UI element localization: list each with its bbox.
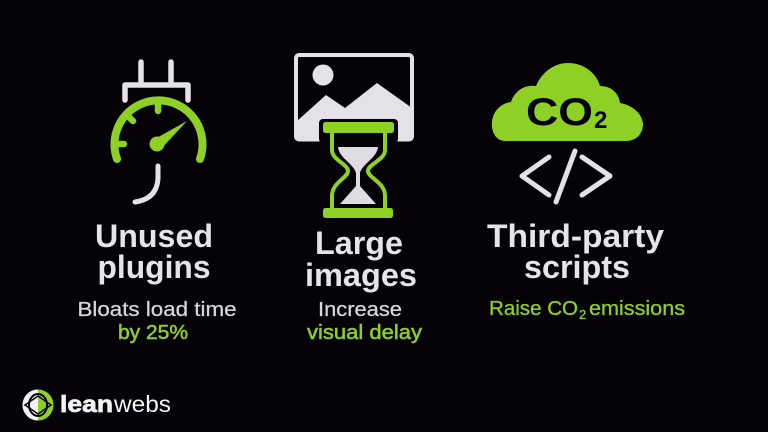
text: raise CO2 emissions: Raise CO	[489, 298, 578, 320]
wordmark: lean	[60, 391, 113, 417]
panel: third-party scripts	[487, 63, 685, 322]
icon: globe	[22, 390, 54, 420]
text: raise CO2 emissions: 2	[579, 307, 586, 322]
text: increase visual delay: Increase	[318, 299, 402, 321]
panel: large images	[296, 55, 422, 344]
heading: unused plugins	[95, 218, 213, 285]
heading: third-party scripts: Third-party	[487, 218, 664, 254]
panel: unused plugins	[78, 62, 237, 344]
icon: CO2 cloud and code: 2	[594, 107, 607, 134]
heading: large images: Large	[315, 225, 403, 261]
heading: large images	[305, 225, 417, 293]
heading: third-party scripts	[487, 218, 664, 285]
text: increase visual delay	[307, 299, 422, 344]
text: bloats load time	[78, 299, 237, 344]
icon: plug and speedometer	[114, 62, 203, 202]
heading: large images: images	[305, 257, 417, 293]
text: raise CO2 emissions: emissions	[589, 298, 685, 320]
wordmark	[60, 391, 171, 417]
logo: leanwebs	[22, 390, 171, 420]
text: bloats load time: Bloats load time	[78, 299, 237, 321]
text: bloats load time: by 25%	[118, 322, 188, 344]
heading: third-party scripts: scripts	[524, 249, 630, 285]
icon: CO2 cloud and code: CO	[526, 91, 593, 134]
wordmark: webs	[113, 391, 171, 417]
heading: unused plugins: plugins	[98, 249, 210, 285]
icon: image with hourglass	[296, 55, 412, 219]
text: raise CO2 emissions	[489, 298, 685, 322]
heading: unused plugins: Unused	[95, 218, 213, 254]
text: increase visual delay: visual delay	[307, 322, 422, 344]
icon: CO2 cloud and code	[492, 63, 643, 202]
